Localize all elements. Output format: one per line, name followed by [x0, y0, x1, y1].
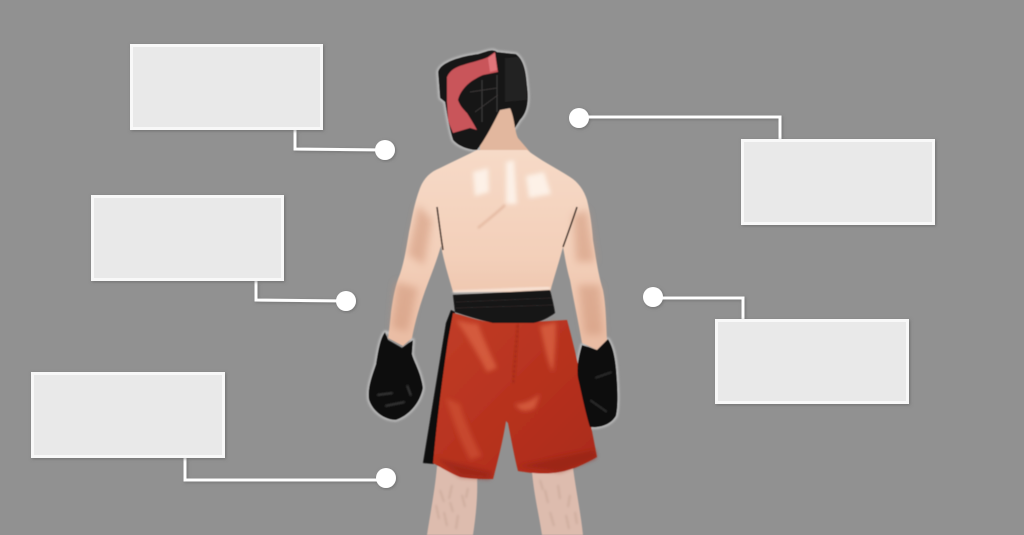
left glove sheen: [377, 385, 411, 406]
right leg: [532, 468, 583, 535]
waistband: [453, 290, 555, 323]
figure halo: [369, 50, 618, 427]
panel: top left empty label box: [132, 46, 322, 128]
armpit lines: [437, 207, 577, 250]
left boxing glove: [369, 332, 423, 420]
helmet red panel: [447, 52, 498, 133]
connector: top left box to dot: [295, 130, 395, 160]
shorts satin highlights: [446, 320, 556, 460]
black side stripe: [423, 310, 455, 464]
waistband texture: [456, 298, 553, 308]
connector: middle left box to dot: [256, 281, 356, 311]
shorts centre seam: [513, 325, 518, 385]
panel: top right empty label box: [742, 140, 934, 224]
panel: bottom left empty label box: [32, 374, 224, 456]
back and arm shading: [392, 205, 603, 335]
red shorts: [433, 313, 597, 479]
boxer figure: [369, 50, 618, 535]
spine and blade shading: [478, 205, 505, 228]
connector: top right box to dot: [569, 108, 780, 139]
right glove sheen: [590, 372, 612, 412]
shorts dark folds: [436, 450, 596, 479]
connector: lower right box to dot: [643, 287, 743, 319]
leg hair texture: [436, 480, 577, 529]
helmet: [438, 50, 528, 150]
connector: bottom left box to dot: [185, 458, 396, 488]
panel: middle left empty label box: [92, 196, 282, 280]
right boxing glove: [577, 339, 618, 427]
neck: [480, 108, 530, 156]
waist light edge: [453, 288, 550, 292]
helmet ear padding lines: [470, 75, 498, 122]
panel: lower right empty label box: [716, 320, 908, 402]
torso and arms: [388, 150, 607, 350]
back highlights: [473, 160, 551, 204]
helmet black shell: [438, 50, 528, 150]
helmet side pad: [505, 57, 527, 102]
left leg: [427, 466, 477, 535]
helmet red highlight: [488, 53, 497, 72]
